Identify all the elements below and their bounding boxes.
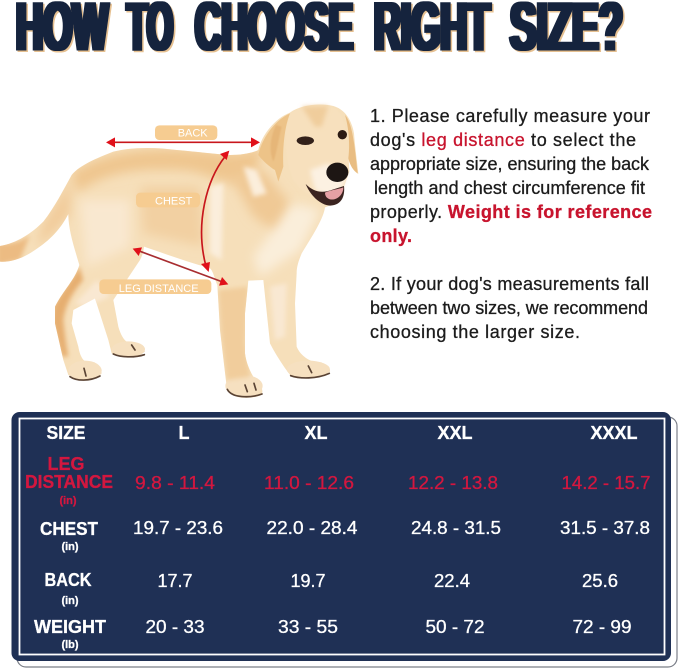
- instruction 2: choosing the larger size.: [370, 322, 580, 342]
- back card: [17, 417, 677, 667]
- size table: [12, 412, 677, 667]
- instruction 1: dog's leg distance to select the: [370, 130, 636, 150]
- row: weight: 50 - 72: [426, 617, 484, 637]
- label: back: [155, 125, 217, 140]
- label: leg distance: LEG DISTANCE: [119, 283, 199, 295]
- label: chest: [136, 193, 200, 208]
- nose: [326, 163, 348, 182]
- forehead shading: [302, 106, 328, 127]
- header row: SIZE: [46, 423, 86, 443]
- instruction 1: appropriate size, ensuring the back: [370, 154, 650, 174]
- dog photo with measurement annotations: [0, 105, 358, 398]
- row: leg distance: 9.8 - 11.4: [135, 473, 215, 493]
- header row: [46, 423, 638, 443]
- row: weight: WEIGHT: [34, 617, 106, 637]
- eyes: [297, 136, 314, 145]
- instruction 2: 2. If your dog's measurements fall: [370, 274, 649, 294]
- ear right: [345, 115, 358, 173]
- row: chest: 24.8 - 31.5: [411, 518, 501, 538]
- arrow: leg distance: [133, 247, 228, 286]
- instruction 2: [370, 274, 649, 342]
- row: back: 19.7: [290, 571, 326, 591]
- dog illustration: [0, 105, 358, 398]
- row: chest: CHEST: [40, 519, 98, 539]
- row: leg distance: (in): [59, 495, 77, 507]
- table panel: [12, 412, 671, 661]
- row: leg distance: 12.2 - 13.8: [408, 473, 498, 493]
- row: leg distance: 14.2 - 15.7: [562, 473, 650, 493]
- row: back: BACK: [44, 570, 92, 590]
- row: weight: 20 - 33: [146, 617, 204, 637]
- row: weight: [34, 617, 632, 651]
- shading: flank: [140, 187, 203, 247]
- instruction 1: [370, 106, 652, 246]
- header row: XXXL: [590, 423, 638, 443]
- row: back: (in): [61, 595, 79, 607]
- label: back: BACK: [178, 128, 208, 140]
- label: chest: CHEST: [155, 196, 193, 208]
- row: chest: [40, 518, 650, 553]
- shading: shoulder: [232, 169, 291, 230]
- muzzle: [310, 163, 347, 200]
- arrow: back: [106, 137, 260, 147]
- instructions text: [370, 106, 652, 342]
- row: back: 17.7: [158, 571, 192, 591]
- instruction 1: properly. Weight is for reference: [370, 202, 652, 222]
- row: weight: 33 - 55: [278, 617, 338, 637]
- instruction 1: length and chest circumference fit: [374, 178, 645, 198]
- row: back: 22.4: [434, 571, 470, 591]
- row: weight: 72 - 99: [572, 617, 632, 637]
- mouth: [306, 184, 344, 206]
- paw shapes: [68, 341, 330, 397]
- row: chest: 22.0 - 28.4: [266, 518, 358, 538]
- instruction 1: 1. Please carefully measure your: [370, 106, 650, 126]
- row: back: 25.6: [582, 571, 618, 591]
- row: leg distance: DISTANCE: [25, 472, 113, 492]
- shading: back fur: [72, 147, 263, 193]
- row: leg distance: LEG: [47, 454, 85, 474]
- title: [16, 0, 623, 65]
- header row: XXL: [437, 423, 473, 443]
- row: leg distance: 11.0 - 12.6: [264, 473, 354, 493]
- instruction 2: between two sizes, we recommend: [370, 298, 648, 318]
- head: [286, 106, 349, 205]
- shading: front legs: [218, 287, 250, 380]
- row: chest: (in): [61, 541, 79, 553]
- paw claws: [70, 345, 329, 397]
- instruction 1: only.: [370, 226, 412, 246]
- header row: L: [178, 423, 190, 443]
- label: leg distance: [99, 279, 211, 295]
- arrow: chest: [201, 151, 229, 272]
- shading: hind leg orange edge: [52, 267, 83, 357]
- shading: tail: [0, 235, 30, 265]
- row: back: [44, 570, 618, 607]
- row: chest: 31.5 - 37.8: [560, 518, 650, 538]
- row: leg distance: [25, 454, 650, 507]
- ear left: [258, 113, 290, 182]
- row: weight: (lb): [61, 639, 79, 651]
- row: chest: 19.7 - 23.6: [133, 518, 223, 538]
- header row: XL: [304, 423, 328, 443]
